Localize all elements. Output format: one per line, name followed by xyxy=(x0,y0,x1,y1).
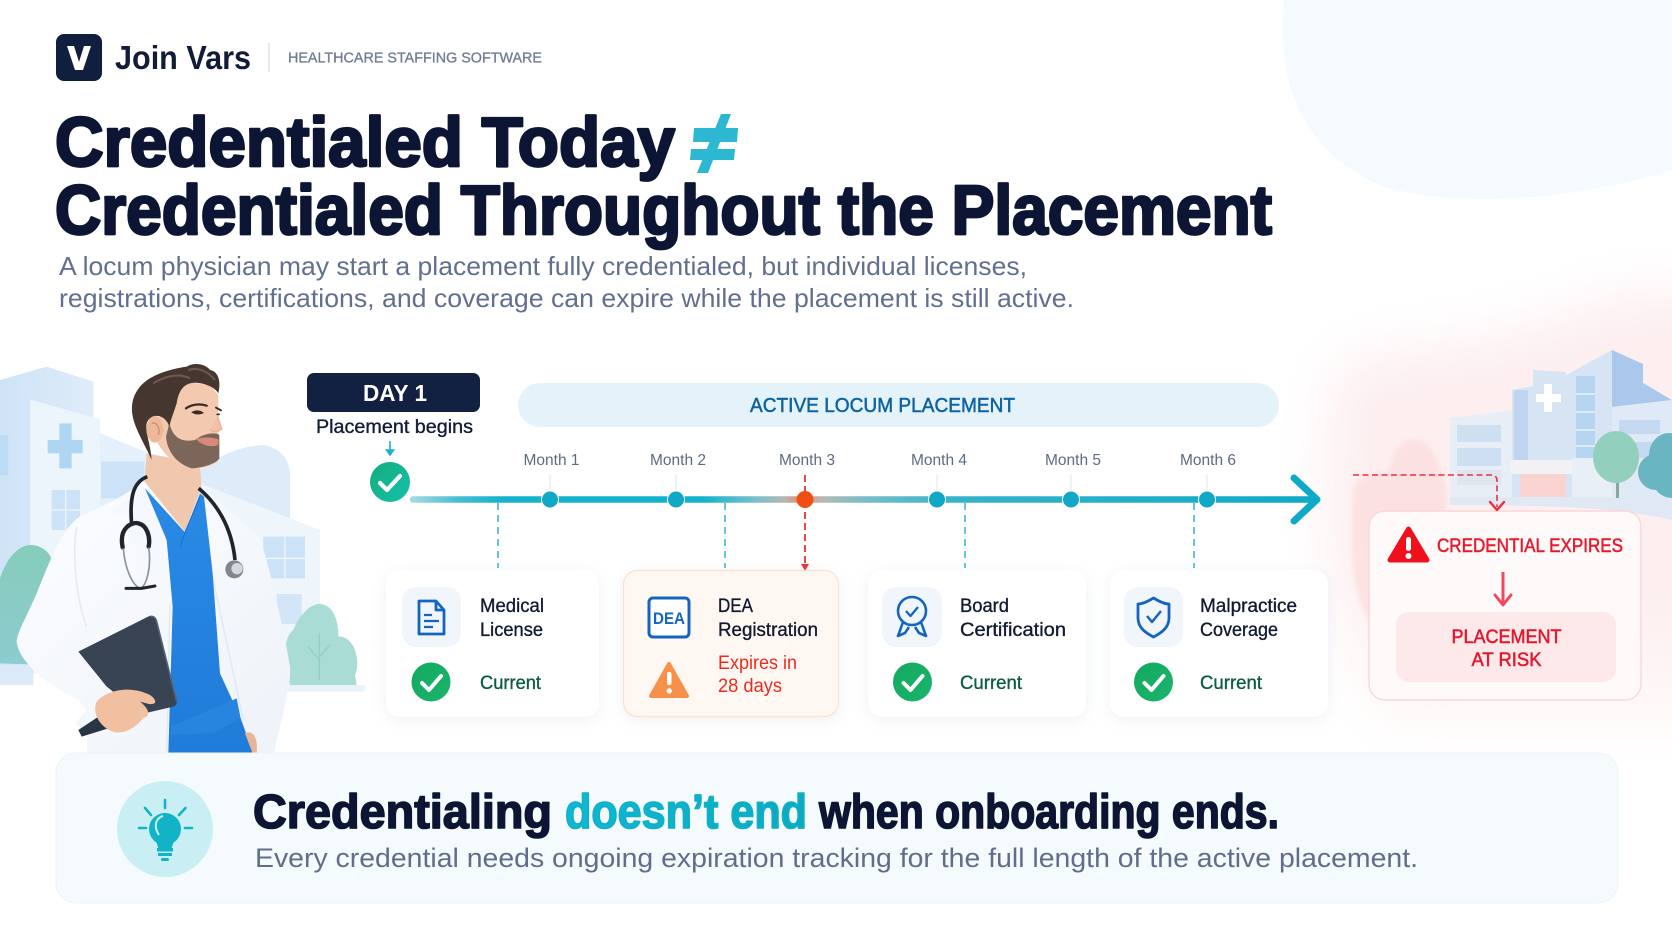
placement at risk box: AT RISK xyxy=(1472,650,1542,671)
icon: status check xyxy=(1134,662,1173,702)
timeline xyxy=(307,373,1317,571)
icon: status check xyxy=(893,662,932,702)
card: medical license: Medical xyxy=(480,595,544,617)
icon: dea badge: DEA xyxy=(653,610,685,628)
illustration: hospital backdrop left xyxy=(0,367,367,753)
title line 2: Credentialed Throughout the Placement xyxy=(55,171,1272,249)
month labels: Month 4 xyxy=(911,452,967,469)
card: dea registration: 28 days xyxy=(718,676,782,697)
card: malpractice coverage: Malpractice xyxy=(1200,595,1297,617)
headline: doesn’t end xyxy=(565,786,807,839)
panel: bottom takeaway xyxy=(56,753,1618,903)
card: board certification: Certification xyxy=(960,619,1066,641)
head xyxy=(132,364,222,469)
tagline: HEALTHCARE STAFFING SOFTWARE xyxy=(288,50,542,66)
card: medical license: Current xyxy=(480,673,542,694)
illustration: hospital right xyxy=(1450,350,1672,520)
icon: logo xyxy=(56,34,102,81)
brand name: Join Vars xyxy=(115,39,251,76)
hand xyxy=(95,690,155,732)
icon: tablet xyxy=(78,616,177,737)
month labels: Month 1 xyxy=(524,452,580,469)
title xyxy=(55,103,1272,249)
placement at risk box xyxy=(1396,612,1616,682)
month labels: Month 5 xyxy=(1045,452,1101,469)
icon: warning xyxy=(651,664,687,696)
background: pink glow right xyxy=(1328,293,1672,725)
icon: stethoscope xyxy=(122,477,243,588)
icon: red warning xyxy=(1390,529,1427,560)
month labels xyxy=(524,452,1236,469)
month 3 alert marker xyxy=(796,491,814,508)
header: brand xyxy=(56,34,542,81)
card: malpractice coverage: Current xyxy=(1200,673,1263,694)
icon: bush right xyxy=(285,604,357,685)
hand in pocket xyxy=(245,732,257,753)
icon: document xyxy=(419,601,444,634)
icon: award xyxy=(898,597,926,636)
subtitle: registrations, certifications, and coverage can expire while the placement is still active. xyxy=(59,283,1074,313)
card: board certification: Current xyxy=(960,673,1023,694)
icon: dea badge xyxy=(649,598,689,637)
icon: status check xyxy=(412,662,450,702)
arrow: timeline axis xyxy=(413,478,1317,521)
day 1 badge xyxy=(307,373,480,412)
background: blue blob top right xyxy=(1283,0,1672,199)
card: malpractice coverage: Coverage xyxy=(1200,619,1278,641)
month labels: Month 3 xyxy=(779,452,835,469)
headline xyxy=(253,786,1279,839)
icon: trees xyxy=(1593,431,1672,498)
card: medical license xyxy=(386,570,599,717)
scrubs xyxy=(145,488,253,753)
placement begins label: Placement begins xyxy=(316,417,473,438)
headline: when onboarding ends. xyxy=(818,786,1279,839)
card: dea registration: DEA xyxy=(718,595,753,617)
callout: credential expires xyxy=(1353,475,1641,700)
card: malpractice coverage xyxy=(1110,570,1328,717)
subtitle: A locum physician may start a placement fully credentialed, but individual licenses, xyxy=(59,251,1027,281)
card: board certification xyxy=(868,570,1086,717)
neck xyxy=(144,453,202,532)
placement at risk box: PLACEMENT xyxy=(1452,627,1562,648)
active placement band xyxy=(518,383,1279,427)
card: board certification: Board xyxy=(960,595,1009,617)
month labels: Month 6 xyxy=(1180,452,1236,469)
card: dea registration: Expires in xyxy=(718,653,797,674)
icon: not equal sign xyxy=(690,114,738,173)
illustration: doctor xyxy=(17,364,290,753)
active placement band: ACTIVE LOCUM PLACEMENT xyxy=(750,395,1015,417)
arrow: day 1 pointer xyxy=(386,441,394,455)
day 1 badge: DAY 1 xyxy=(363,380,427,406)
month labels: Month 2 xyxy=(650,452,706,469)
subtitle xyxy=(59,251,1074,313)
supporting text: Every credential needs ongoing expiration tracking for the full length of the active placement. xyxy=(255,843,1418,873)
card: dea registration: Registration xyxy=(718,619,818,641)
callout: credential expires: CREDENTIAL EXPIRES xyxy=(1437,536,1623,557)
icon: light bulb xyxy=(117,781,213,877)
arrow: to placement at risk xyxy=(1495,572,1511,605)
arrow: dashed to callout xyxy=(1353,475,1504,510)
coat xyxy=(17,480,290,753)
icon: shield xyxy=(1138,598,1169,637)
card: dea registration xyxy=(624,570,838,716)
headline: Credentialing xyxy=(253,786,552,839)
title line 1: Credentialed Today xyxy=(55,103,675,181)
icon: day 1 check xyxy=(370,462,410,502)
month markers xyxy=(541,490,1216,508)
arrow: month 3 dashed alert xyxy=(801,475,809,571)
card: medical license: License xyxy=(480,619,543,641)
